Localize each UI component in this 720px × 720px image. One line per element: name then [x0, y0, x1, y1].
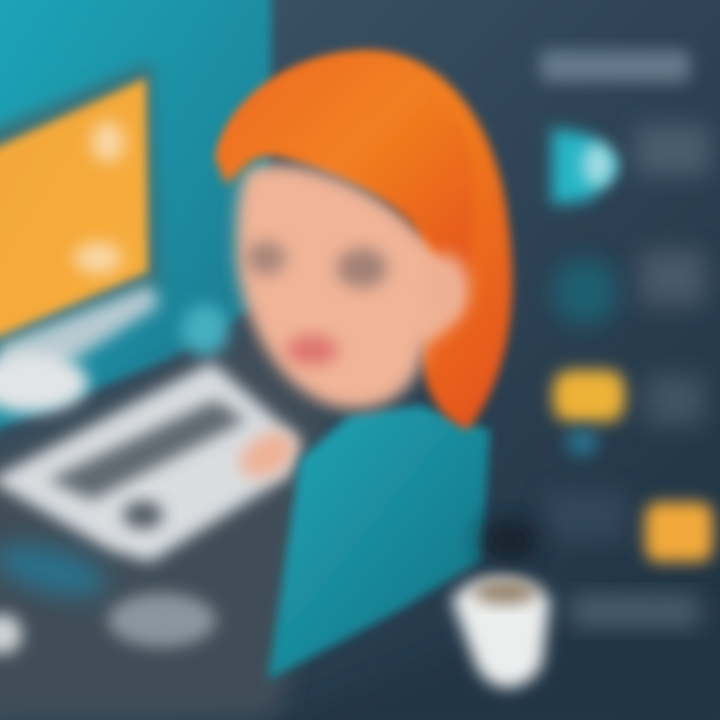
- face: [237, 164, 458, 409]
- icon: dark teal circle: [552, 259, 618, 325]
- icon: yellow envelope: [553, 370, 625, 422]
- icon: orange folder: [645, 502, 713, 562]
- screen highlight bottom: [74, 242, 122, 274]
- text block: first item: [635, 125, 710, 175]
- sweater: [268, 405, 490, 680]
- monitor neck: [0, 285, 160, 375]
- text block: fourth item: [545, 490, 625, 540]
- right panel: heading: [540, 50, 690, 82]
- icon: small blue marker: [566, 428, 598, 456]
- text block: second item: [640, 250, 705, 305]
- desk item: grey mouse: [108, 593, 216, 647]
- monitor: [0, 62, 160, 413]
- text block: third item: [645, 375, 705, 425]
- text block: fifth item: [570, 595, 700, 627]
- monitor screen: [0, 78, 148, 345]
- desk teal glow: [181, 304, 229, 356]
- shadow behind cup: [480, 518, 540, 562]
- trackpad: [123, 501, 163, 529]
- coffee: [473, 580, 537, 604]
- mouth: [286, 335, 338, 365]
- keyboard: [0, 362, 304, 562]
- hair fringe: [216, 58, 475, 300]
- right eye: [337, 248, 387, 288]
- icon: teal play button: [552, 128, 620, 205]
- hand: [232, 423, 304, 487]
- hair back: [218, 50, 512, 430]
- monitor frame: [0, 62, 160, 365]
- play highlight: [582, 143, 614, 187]
- cup body: [452, 578, 550, 688]
- desk item: blue stationery: [0, 534, 112, 606]
- woman: [216, 50, 512, 680]
- keys: [48, 400, 246, 500]
- desk item: white disc: [0, 614, 22, 654]
- background: teal wall: [0, 0, 272, 440]
- ear: [421, 254, 469, 322]
- floor: lower right shadow: [260, 590, 720, 720]
- screen highlight top: [91, 121, 125, 163]
- keyboard body: [0, 362, 300, 562]
- monitor base: [0, 353, 88, 413]
- left eye: [246, 241, 286, 275]
- desk surface: [0, 330, 330, 720]
- coffee cup: [452, 578, 550, 688]
